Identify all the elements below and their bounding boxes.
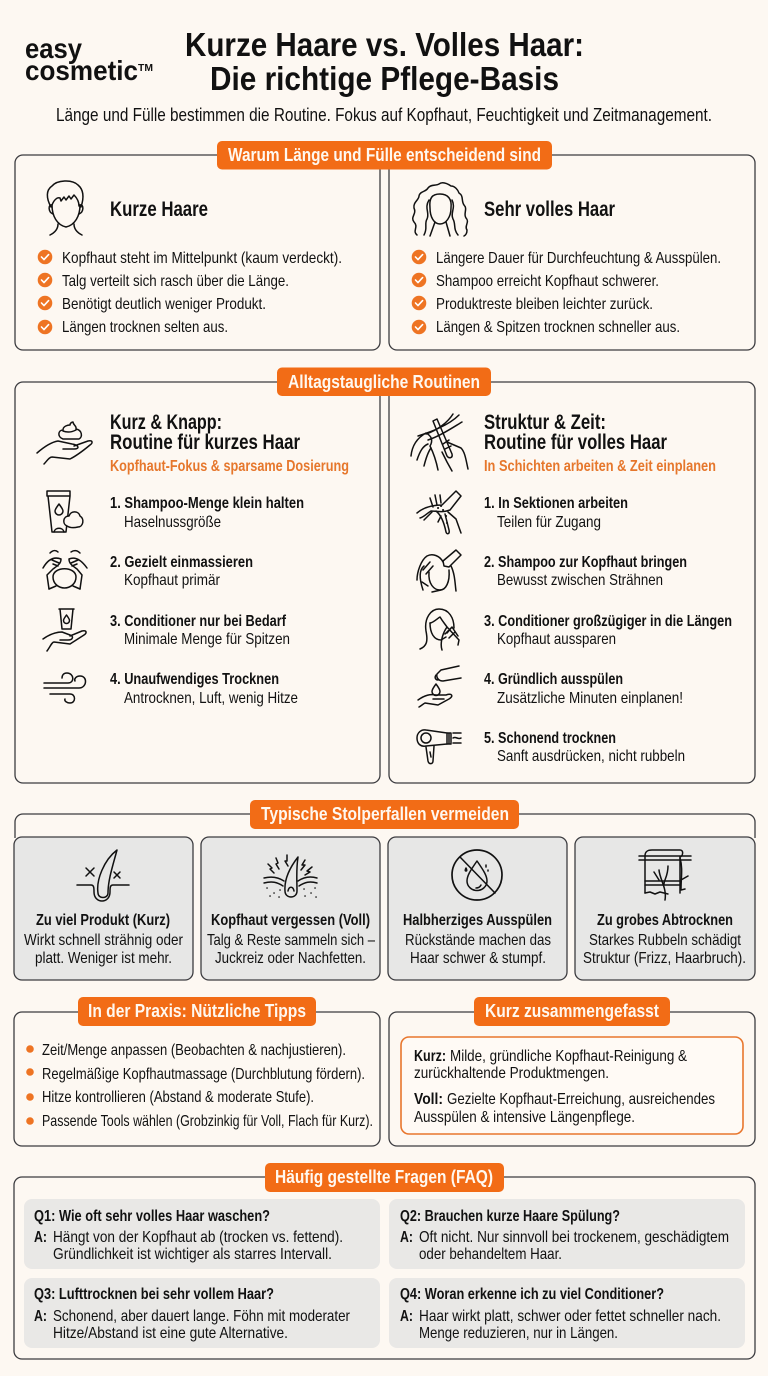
summary box	[401, 1037, 743, 1134]
card text	[583, 912, 746, 967]
step 4: Gründlich ausspülen: Zusätzliche Minuten einplanen!	[497, 690, 683, 707]
icon: tube with product	[47, 491, 83, 532]
step 1: In Sektionen: Teilen für Zugang	[497, 514, 601, 531]
tips list: Passende Tools wählen (Grobzinkig für Voll, Flach für Kurz).	[42, 1113, 373, 1130]
icon: hair with product	[77, 850, 129, 901]
card text: Juckreiz oder Nachfetten.	[215, 950, 366, 967]
icon: shampoo to scalp	[417, 550, 461, 592]
icon: irritated scalp	[264, 855, 317, 897]
heading badge: Alltagstaugliche Routinen: Alltagstaugliche Routinen	[288, 372, 480, 392]
icon: combing hair with hands	[411, 414, 468, 471]
card text	[403, 912, 552, 967]
checklist: Sehr volles Haar: Shampoo erreicht Kopfhaut schwerer.	[436, 273, 659, 290]
step 2: Gezielt einmassieren: Kopfhaut primär	[124, 572, 221, 589]
card text: Wirkt schnell strähnig oder	[24, 932, 184, 949]
heading: Sehr volles Haar: Sehr volles Haar	[484, 198, 615, 221]
title: Die richtige Pflege-Basis	[210, 60, 559, 97]
tips list	[26, 1042, 373, 1130]
step 3: Conditioner	[110, 613, 290, 648]
section: FAQ	[14, 1163, 755, 1359]
section: Warum Länge und Fülle entscheidend sind	[15, 141, 755, 350]
heading badge: Kurz zusammengefasst: Kurz zusammengefasst	[485, 1001, 659, 1021]
FAQ Q3: Schonend, aber dauert lange. Föhn mit moderater	[53, 1308, 351, 1325]
step 2: Gezielt einmassieren	[110, 554, 253, 589]
FAQ Q2: oder behandeltem Haar.	[419, 1246, 562, 1263]
FAQ Q1: Q1: Wie oft sehr volles Haar waschen?	[34, 1208, 270, 1225]
section: Alltagstaugliche Routinen	[15, 368, 755, 783]
step 5: Schonend trocknen: Sanft ausdrücken, nicht rubbeln	[497, 748, 685, 765]
card text: Zu grobes Abtrocknen	[597, 912, 733, 929]
FAQ Q1: A:	[34, 1229, 47, 1246]
icon: crossed-out drop	[452, 850, 502, 900]
card text: platt. Weniger ist mehr.	[35, 950, 172, 967]
FAQ Q2: Q2: Brauchen kurze Haare Spülung?	[400, 1208, 620, 1225]
step 3: Conditioner: Minimale Menge für Spitzen	[124, 631, 290, 648]
icon: conditioner on hand	[43, 609, 86, 651]
heading: Routine für kurzes Haar: Kopfhaut-Fokus & sparsame Dosierung	[110, 458, 349, 475]
heading: Routine für volles Haar: In Schichten arbeiten & Zeit einplanen	[484, 458, 716, 475]
FAQ Q1: Gründlichkeit ist wichtiger als starres Intervall.	[53, 1246, 332, 1263]
card text: Haar schwer & stumpf.	[410, 950, 546, 967]
summary box: Milde, gründliche Kopfhaut-Reinigung &	[450, 1048, 687, 1065]
step 1: Shampoo-Menge: Haselnussgröße	[124, 514, 221, 531]
card text: Zu viel Produkt (Kurz)	[36, 912, 170, 929]
card text	[207, 912, 375, 967]
panel: Kurze Haare	[15, 155, 380, 350]
heading: Routine für kurzes Haar	[110, 411, 349, 475]
heading: Routine für kurzes Haar: Kurz & Knapp:	[110, 411, 222, 434]
step 1: Shampoo-Menge: 1. Shampoo-Menge klein halten	[110, 495, 304, 512]
tips list: Hitze kontrollieren (Abstand & moderate Stufe).	[42, 1089, 314, 1106]
title: Kurze Haare vs. Volles Haar:	[185, 26, 584, 63]
panel: Routine für kurzes Haar	[15, 382, 380, 783]
step 1: In Sektionen	[484, 495, 628, 531]
step 1: In Sektionen: 1. In Sektionen arbeiten	[484, 495, 628, 512]
heading badge: FAQ: Häufig gestellte Fragen (FAQ)	[275, 1167, 493, 1187]
icon: towel and damaged hair	[639, 850, 691, 900]
icon: hair dryer	[417, 730, 461, 764]
heading: Routine für volles Haar: Routine für volles Haar	[484, 431, 667, 454]
logo: easy	[25, 33, 82, 64]
step 4: Gründlich ausspülen: 4. Gründlich ausspülen	[484, 671, 623, 688]
icon: scalp massage	[43, 551, 87, 589]
summary box: Gezielte Kopfhaut-Erreichung, ausreichendes	[447, 1091, 715, 1108]
step 2: Shampoo zur Kopfhaut: Bewusst zwischen Strähnen	[497, 572, 663, 589]
heading badge: Stolperfallen	[250, 800, 519, 829]
checklist: Sehr volles Haar: Produktreste bleiben leichter zurück.	[436, 296, 653, 313]
step 3: Conditioner	[484, 613, 732, 648]
title	[185, 26, 584, 97]
card: Zu viel Produkt	[14, 837, 193, 980]
heading: Routine für kurzes Haar: Routine für kurzes Haar	[110, 431, 300, 454]
step 4: Trocknen: Antrocknen, Luft, wenig Hitze	[124, 690, 298, 707]
step 3: Conditioner: 3. Conditioner nur bei Bedarf	[110, 613, 287, 630]
FAQ Q3: Q3: Lufttrocknen bei sehr vollem Haar?	[34, 1286, 274, 1303]
panel: In der Praxis	[14, 997, 380, 1146]
card text: Talg & Reste sammeln sich –	[207, 932, 375, 949]
FAQ Q4	[389, 1278, 745, 1348]
icon: conditioner in lengths	[420, 609, 459, 650]
checklist: Sehr volles Haar	[412, 250, 721, 336]
logo: TM	[138, 63, 153, 74]
heading badge: Kurz zusammengefasst	[474, 997, 670, 1026]
card text: Starkes Rubbeln schädigt	[589, 932, 741, 949]
heading badge: Nützliche Tipps	[78, 997, 316, 1026]
icon: sections with clip	[417, 491, 461, 534]
summary box: Ausspülen & intensive Längenpflege.	[414, 1109, 635, 1126]
heading badge: Alltagstaugliche Routinen	[277, 368, 491, 396]
FAQ Q2	[389, 1199, 745, 1269]
FAQ Q4: Q4: Woran erkenne ich zu viel Conditioner?	[400, 1286, 664, 1303]
heading: Kurze Haare: Kurze Haare	[110, 198, 208, 221]
checklist: Kurze Haare: Längen trocknen selten aus.	[62, 319, 228, 336]
logo: cosmetic	[25, 55, 138, 86]
tips list: Zeit/Menge anpassen (Beobachten & nachjustieren).	[42, 1042, 346, 1059]
FAQ Q2: A:	[400, 1229, 413, 1246]
logo	[25, 33, 153, 86]
FAQ Q3	[24, 1278, 380, 1348]
icon: hand with foam	[37, 422, 92, 464]
step 2: Gezielt einmassieren: 2. Gezielt einmassieren	[110, 554, 253, 571]
heading badge: Warum Länge und Fülle	[217, 141, 552, 170]
summary box: Voll:	[414, 1091, 443, 1108]
heading: Routine für volles Haar: Struktur & Zeit:	[484, 411, 606, 434]
step 4: Trocknen	[110, 671, 298, 707]
panel: Sehr volles Haar	[389, 155, 755, 350]
panel outline	[15, 814, 755, 838]
icon: rinsing	[418, 666, 461, 707]
checklist: Kurze Haare	[38, 250, 342, 336]
heading badge: Warum Länge und Fülle: Warum Länge und Fülle entscheidend sind	[228, 145, 541, 165]
card: Kopfhaut vergessen	[201, 837, 380, 980]
FAQ Q3: A:	[34, 1308, 47, 1325]
summary box: Kurz:	[414, 1048, 446, 1065]
heading badge: Stolperfallen: Typische Stolperfallen vermeiden	[261, 804, 509, 824]
FAQ Q1: Hängt von der Kopfhaut ab (trocken vs. fettend).	[53, 1229, 343, 1246]
card text: Rückstände machen das	[405, 932, 551, 949]
card: Zu grobes Abtrocknen	[575, 837, 755, 980]
FAQ Q4: Haar wirkt platt, schwer oder fettet schneller nach.	[419, 1308, 721, 1325]
step 2: Shampoo zur Kopfhaut	[484, 554, 687, 589]
summary box: zurückhaltende Produktmengen.	[414, 1065, 609, 1082]
step 5: Schonend trocknen	[484, 730, 685, 765]
tips list: Regelmäßige Kopfhautmassage (Durchblutung fördern).	[42, 1066, 365, 1083]
checklist: Kurze Haare: Kopfhaut steht im Mittelpunkt (kaum verdeckt).	[62, 250, 342, 267]
step 4: Trocknen: 4. Unaufwendiges Trocknen	[110, 671, 279, 688]
checklist: Kurze Haare: Benötigt deutlich weniger Produkt.	[62, 296, 266, 313]
FAQ Q1	[24, 1199, 380, 1269]
section: Typische Stolperfallen vermeiden	[14, 800, 755, 980]
FAQ Q4: A:	[400, 1308, 413, 1325]
card text: Kopfhaut vergessen (Voll)	[211, 912, 370, 929]
icon: short hair head	[47, 181, 83, 235]
heading badge: FAQ	[265, 1163, 504, 1192]
step 2: Shampoo zur Kopfhaut: 2. Shampoo zur Kopfhaut bringen	[484, 554, 687, 571]
panel: Kurz zusammengefasst	[389, 997, 755, 1146]
card text: Halbherziges Ausspülen	[403, 912, 552, 929]
step 1: Shampoo-Menge	[110, 495, 304, 531]
panel: Routine für volles Haar	[389, 382, 755, 783]
heading: Routine für volles Haar	[484, 411, 716, 475]
FAQ Q3: Hitze/Abstand ist eine gute Alternative.	[53, 1325, 288, 1342]
step 3: Conditioner: Kopfhaut aussparen	[497, 631, 616, 648]
checklist: Kurze Haare: Talg verteilt sich rasch über die Länge.	[62, 273, 289, 290]
icon: voluminous curly hair	[413, 183, 467, 236]
step 4: Gründlich ausspülen	[484, 671, 683, 707]
icon: wind	[44, 673, 86, 703]
step 5: Schonend trocknen: 5. Schonend trocknen	[484, 730, 616, 747]
checklist: Sehr volles Haar: Längen & Spitzen trocknen schneller aus.	[436, 319, 680, 336]
FAQ Q4: Menge reduzieren, nur in Längen.	[419, 1325, 618, 1342]
card: Halbherziges Ausspülen	[388, 837, 567, 980]
heading badge: Nützliche Tipps: In der Praxis: Nützliche Tipps	[88, 1001, 306, 1021]
card text	[24, 912, 184, 967]
